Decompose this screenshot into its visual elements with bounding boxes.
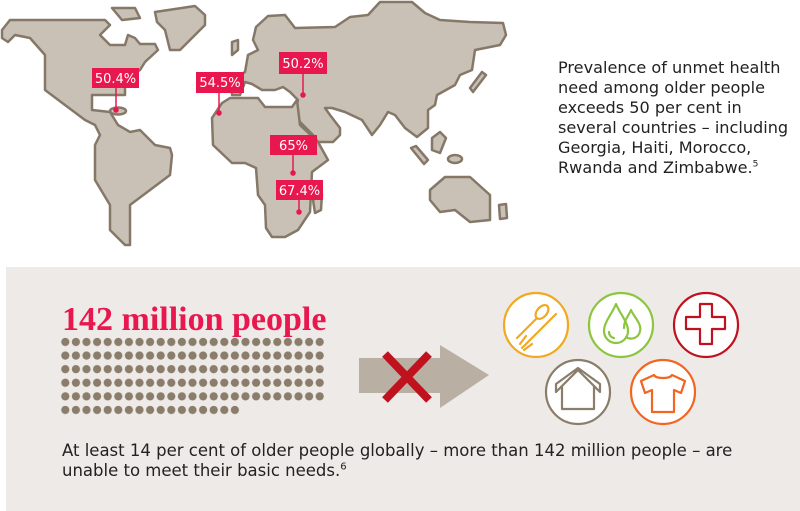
icon: clothing	[631, 360, 695, 424]
label boxes: 65%	[279, 139, 308, 154]
icon: food	[504, 293, 568, 357]
arrow with cross	[359, 345, 489, 408]
africa	[212, 98, 328, 237]
label boxes	[92, 52, 327, 200]
label boxes: 50.4%	[95, 72, 136, 87]
north america	[2, 20, 172, 245]
text: basic needs: At least 14 per cent of older people globally – more than 142 million people – are unable to meet their basic needs.6	[62, 441, 732, 480]
text: unmet health need: Prevalence of unmet health need among older people exceeds 50 per cent in several countries – including Georgia, Haiti, Morocco, Rwanda and Zimbabwe.5	[558, 58, 788, 177]
icon: health	[674, 293, 738, 357]
world map	[0, 0, 508, 246]
eurasia	[232, 2, 506, 142]
icon: shelter	[546, 360, 610, 424]
icons: basic needs	[502, 292, 740, 426]
panel: basic needs	[6, 267, 800, 511]
callout pins	[114, 74, 305, 214]
label boxes: 50.2%	[282, 57, 324, 72]
label boxes: 54.5%	[199, 76, 241, 91]
dot grid	[61, 338, 324, 414]
icon: water	[589, 293, 653, 357]
heading: 142 million people	[62, 301, 326, 338]
label boxes: 67.4%	[279, 184, 320, 199]
